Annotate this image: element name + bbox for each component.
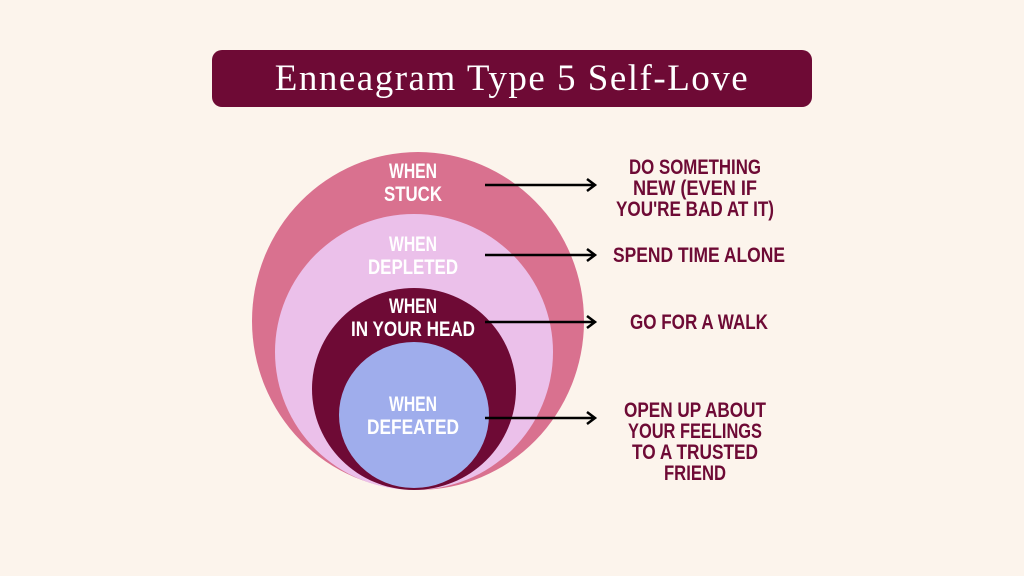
circle: depleted: WHEN [389, 233, 437, 256]
advice text: SPEND TIME ALONE [613, 244, 785, 267]
circle: in your head [312, 288, 516, 490]
circle: defeated [339, 342, 489, 488]
circle: depleted [275, 214, 553, 490]
advice text: NEW (EVEN IF [633, 177, 757, 200]
advice text: DO SOMETHING [629, 156, 761, 179]
advice text [613, 156, 785, 485]
advice text: GO FOR A WALK [630, 311, 768, 334]
circle: in your head: WHEN [389, 295, 437, 318]
title [212, 50, 812, 107]
circle: stuck: WHEN [389, 160, 437, 183]
circle: defeated: WHEN [389, 393, 437, 416]
arrows [485, 179, 595, 424]
circle: stuck: STUCK [384, 183, 442, 206]
advice text: YOUR FEELINGS [628, 420, 762, 443]
circle: defeated: DEFEATED [367, 416, 459, 439]
advice text: TO A TRUSTED [632, 441, 758, 464]
circle: depleted: DEPLETED [368, 256, 458, 279]
advice text: YOU'RE BAD AT IT) [616, 198, 774, 221]
advice text: OPEN UP ABOUT [624, 399, 766, 422]
advice text: FRIEND [664, 462, 726, 485]
circle: in your head: IN YOUR HEAD [351, 318, 475, 341]
circle: stuck [252, 152, 584, 490]
title: Enneagram Type 5 Self-Love [275, 58, 749, 99]
